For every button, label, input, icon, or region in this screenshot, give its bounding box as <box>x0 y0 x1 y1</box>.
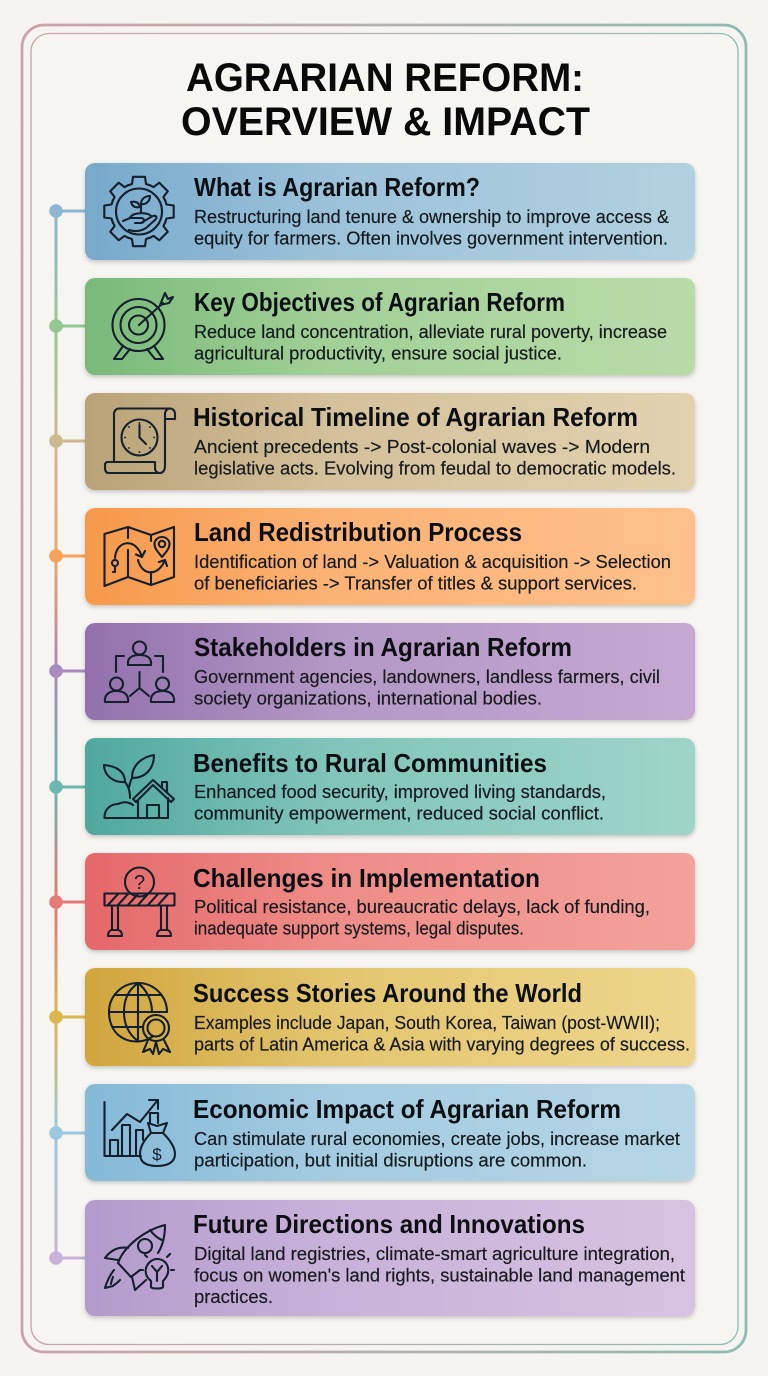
description <box>194 1244 685 1307</box>
description: participation, but initial disruptions are common. <box>194 1150 587 1170</box>
description <box>194 322 667 364</box>
panel: stakeholders <box>85 623 695 720</box>
icon: plant and house <box>104 755 174 818</box>
title: AGRARIAN REFORM: <box>186 56 584 100</box>
description <box>194 897 650 938</box>
icon: growth chart and money bag <box>104 1100 175 1166</box>
description: community empowerment, reduced social conflict. <box>194 804 604 824</box>
description <box>194 782 606 824</box>
description <box>194 207 669 248</box>
icon: folded map with route <box>104 527 174 586</box>
timeline connector spine <box>49 204 86 1265</box>
icon: gear with plant in hand <box>104 177 174 246</box>
panel: benefits <box>85 738 695 835</box>
icon glyph: dollar sign: $ <box>152 1145 162 1164</box>
description: inadequate support systems, legal disputes. <box>194 918 524 938</box>
heading: Benefits to Rural Communities <box>193 748 547 778</box>
description <box>194 667 660 708</box>
panel: challenges <box>85 853 695 950</box>
panel: key objectives <box>85 278 695 375</box>
description: of beneficiaries -> Transfer of titles & support services. <box>194 574 637 594</box>
description: Restructuring land tenure & ownership to improve access & <box>194 207 669 227</box>
description: practices. <box>194 1287 273 1307</box>
description <box>194 1129 680 1170</box>
description: Digital land registries, climate-smart agriculture integration, <box>194 1244 675 1264</box>
panel: success stories <box>85 968 695 1066</box>
heading: Success Stories Around the World <box>193 978 582 1008</box>
icon: scroll with clock <box>105 408 175 473</box>
description: Examples include Japan, South Korea, Taiwan (post-WWII); <box>194 1013 660 1033</box>
description: Reduce land concentration, alleviate rural poverty, increase <box>194 322 667 342</box>
icon: rocket and light bulb <box>105 1225 174 1290</box>
icon glyph: question mark: ? <box>134 872 145 894</box>
description: Political resistance, bureaucratic delays, lack of funding, <box>194 897 650 917</box>
description <box>194 552 671 594</box>
panel: land redistribution <box>85 508 695 605</box>
description: parts of Latin America & Asia with varying degrees of success. <box>194 1034 690 1054</box>
description: agricultural productivity, ensure social justice. <box>194 344 562 364</box>
panel: future directions <box>85 1200 695 1316</box>
description <box>194 1013 690 1054</box>
description: equity for farmers. Often involves government intervention. <box>194 228 668 248</box>
icon: barrier with question mark <box>104 868 174 936</box>
icon: globe with award rosette <box>109 983 170 1054</box>
heading: Future Directions and Innovations <box>193 1209 585 1239</box>
heading: Historical Timeline of Agrarian Reform <box>193 402 638 432</box>
panel: economic impact <box>85 1084 695 1181</box>
heading: Land Redistribution Process <box>194 517 522 547</box>
description: Can stimulate rural economies, create jobs, increase market <box>194 1129 680 1149</box>
heading: Stakeholders in Agrarian Reform <box>194 632 572 662</box>
title <box>181 56 590 144</box>
heading: Economic Impact of Agrarian Reform <box>193 1094 621 1124</box>
heading: Challenges in Implementation <box>193 863 540 893</box>
icon: three connected people <box>105 642 174 702</box>
title: OVERVIEW & IMPACT <box>181 100 590 144</box>
heading: What is Agrarian Reform? <box>194 172 480 202</box>
description: Enhanced food security, improved living standards, <box>194 782 606 802</box>
panel: what is agrarian reform <box>85 163 695 260</box>
description <box>194 437 676 478</box>
icon: target with arrow <box>112 293 173 359</box>
description: Government agencies, landowners, landless farmers, civil <box>194 667 660 687</box>
description: focus on women's land rights, sustainable land management <box>194 1266 685 1286</box>
description: society organizations, international bodies. <box>194 688 542 708</box>
description: Ancient precedents -> Post-colonial waves -> Modern <box>194 437 650 457</box>
heading: Key Objectives of Agrarian Reform <box>194 287 565 317</box>
panel: historical timeline <box>85 393 695 490</box>
description: Identification of land -> Valuation & acquisition -> Selection <box>194 552 671 572</box>
description: legislative acts. Evolving from feudal to democratic models. <box>194 458 676 478</box>
